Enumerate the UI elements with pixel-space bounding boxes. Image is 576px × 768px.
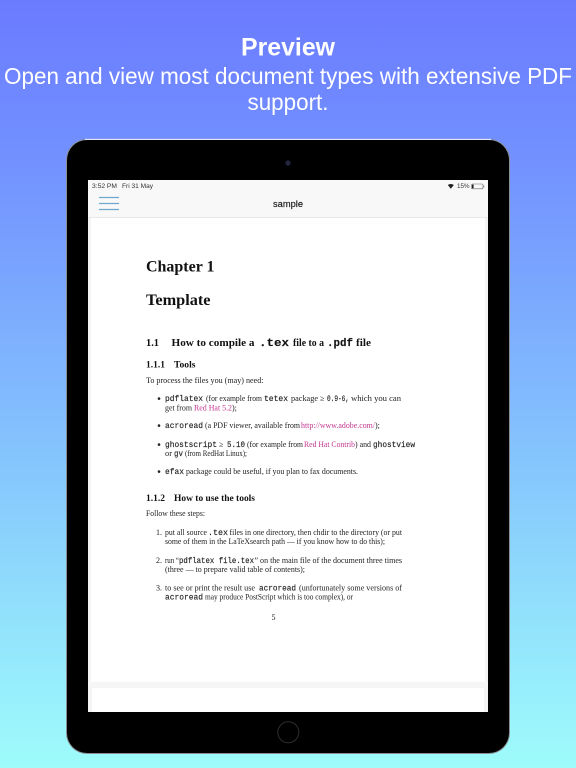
status time: 3:52 PM xyxy=(92,183,117,190)
bullet: ghostscript xyxy=(158,440,415,459)
bullet: acroread xyxy=(158,421,380,431)
tablet device xyxy=(66,139,510,754)
bullet: pdflatex: package xyxy=(291,394,318,403)
step 3: may produce PostScript which is too complex), or xyxy=(205,592,353,602)
bullet: pdflatex xyxy=(158,394,401,412)
step 1: files in one directory, then chdir to the directory (or put xyxy=(230,528,403,537)
step 3: (unfortunately some versions of xyxy=(299,584,402,592)
step 3 xyxy=(156,584,402,602)
step 1: some of them in the LaTeXsearch path — if you know how to do this); xyxy=(165,537,385,546)
subsection 1.1.1 heading: Tools xyxy=(174,360,196,370)
bullet list xyxy=(158,394,415,477)
bullet: pdflatex: 0.9-6, xyxy=(327,395,349,404)
icon: hamburger menu xyxy=(99,198,119,210)
step 1 xyxy=(156,528,403,546)
tablet bezel xyxy=(66,139,510,754)
section 1.1 heading: How to compile a xyxy=(172,337,255,349)
bullet: efax: efax xyxy=(165,468,184,477)
home button xyxy=(278,722,299,743)
bottom page strip xyxy=(88,682,488,712)
step 1: .tex xyxy=(208,529,228,538)
status bar and navigation bar xyxy=(88,180,488,218)
step 2: pdflatex file.tex xyxy=(179,557,254,566)
numbered list xyxy=(156,528,403,602)
bullet: ghostscript: (from RedHat Linux); xyxy=(185,449,247,458)
subsection 1.1.1 heading xyxy=(146,360,196,370)
heading: Preview title and subtitle xyxy=(4,34,572,115)
bullet: ghostscript: Red Hat Contrib xyxy=(304,440,355,449)
bullet: ghostscript: or xyxy=(165,449,172,458)
status date: Fri 31 May xyxy=(122,183,154,190)
bullet: acroread: http://www.adobe.com/ xyxy=(301,421,376,430)
step 1: 1. xyxy=(156,528,162,537)
bullet: pdflatex: (for example from xyxy=(206,394,263,403)
section 1.1 heading xyxy=(146,337,371,350)
step 2 xyxy=(156,556,402,574)
screen xyxy=(88,180,488,712)
section 1.1 heading: file xyxy=(356,337,371,349)
bullet: ghostscript: ghostview xyxy=(373,441,415,450)
step 2: 2. xyxy=(156,556,162,565)
bullet: pdflatex: tetex xyxy=(264,395,288,404)
title: Preview xyxy=(241,34,336,62)
bullet: pdflatex: ≥ xyxy=(320,394,325,403)
bullet: pdflatex: which you can xyxy=(351,394,401,403)
bullet: pdflatex: Red Hat 5.2 xyxy=(194,404,232,412)
bullet: acroread: (a PDF viewer, available from xyxy=(205,421,301,430)
camera xyxy=(285,160,291,166)
section 1.1 heading: 1.1 xyxy=(146,337,159,349)
subtitle line 2: support. xyxy=(248,89,328,115)
battery percent: 15% xyxy=(457,183,470,190)
section 1.1 heading: .tex xyxy=(259,338,289,350)
bullet: pdflatex: pdflatex xyxy=(165,395,203,404)
steps intro: Follow these steps: xyxy=(146,509,205,518)
step 3: to see or print the result use xyxy=(165,584,255,592)
bullet: pdflatex: get from xyxy=(165,404,193,412)
nav title: sample xyxy=(273,199,303,209)
bullet: acroread: acroread xyxy=(165,422,203,431)
icon: battery xyxy=(472,184,484,189)
bullet: ghostscript: ≥ xyxy=(219,440,224,449)
bullet: ghostscript: ) and xyxy=(355,440,371,449)
icon: wifi xyxy=(448,184,454,189)
document page xyxy=(91,218,485,682)
bullet: efax: package could be useful, if you plan to fax documents. xyxy=(186,467,358,476)
page number: 5 xyxy=(272,613,276,622)
subsection 1.1.1 heading: 1.1.1 xyxy=(146,360,166,370)
template heading: Template xyxy=(146,292,210,309)
subsection 1.1.2 heading: 1.1.2 xyxy=(146,493,166,503)
intro text: To process the files you (may) need: xyxy=(146,376,264,385)
step 2: ” on the main file of the document three times xyxy=(254,556,402,565)
step 3: acroread xyxy=(165,594,203,602)
step 1: put all source xyxy=(165,528,207,537)
step 3: 3. xyxy=(156,584,162,592)
bullet: ghostscript: (for example from xyxy=(247,440,304,449)
section 1.1 heading: file to a xyxy=(293,337,324,349)
bullet: ghostscript: gv xyxy=(174,450,183,459)
subsection 1.1.2 heading: How to use the tools xyxy=(174,493,256,503)
bullet: acroread: ); xyxy=(375,421,380,430)
step 2: (three — to prepare valid table of contents); xyxy=(165,565,305,574)
subtitle line 1: Open and view most document types with extensive PDF xyxy=(4,63,572,89)
bullet: pdflatex: ); xyxy=(232,404,237,412)
section 1.1 heading: .pdf xyxy=(327,338,353,350)
step 3: acroread xyxy=(259,584,296,594)
step 2: run “ xyxy=(165,556,179,565)
bullet: ghostscript: 5.10 xyxy=(227,441,245,450)
bullet: ghostscript: ghostscript xyxy=(165,441,217,450)
chapter heading: Chapter 1 xyxy=(146,259,214,276)
